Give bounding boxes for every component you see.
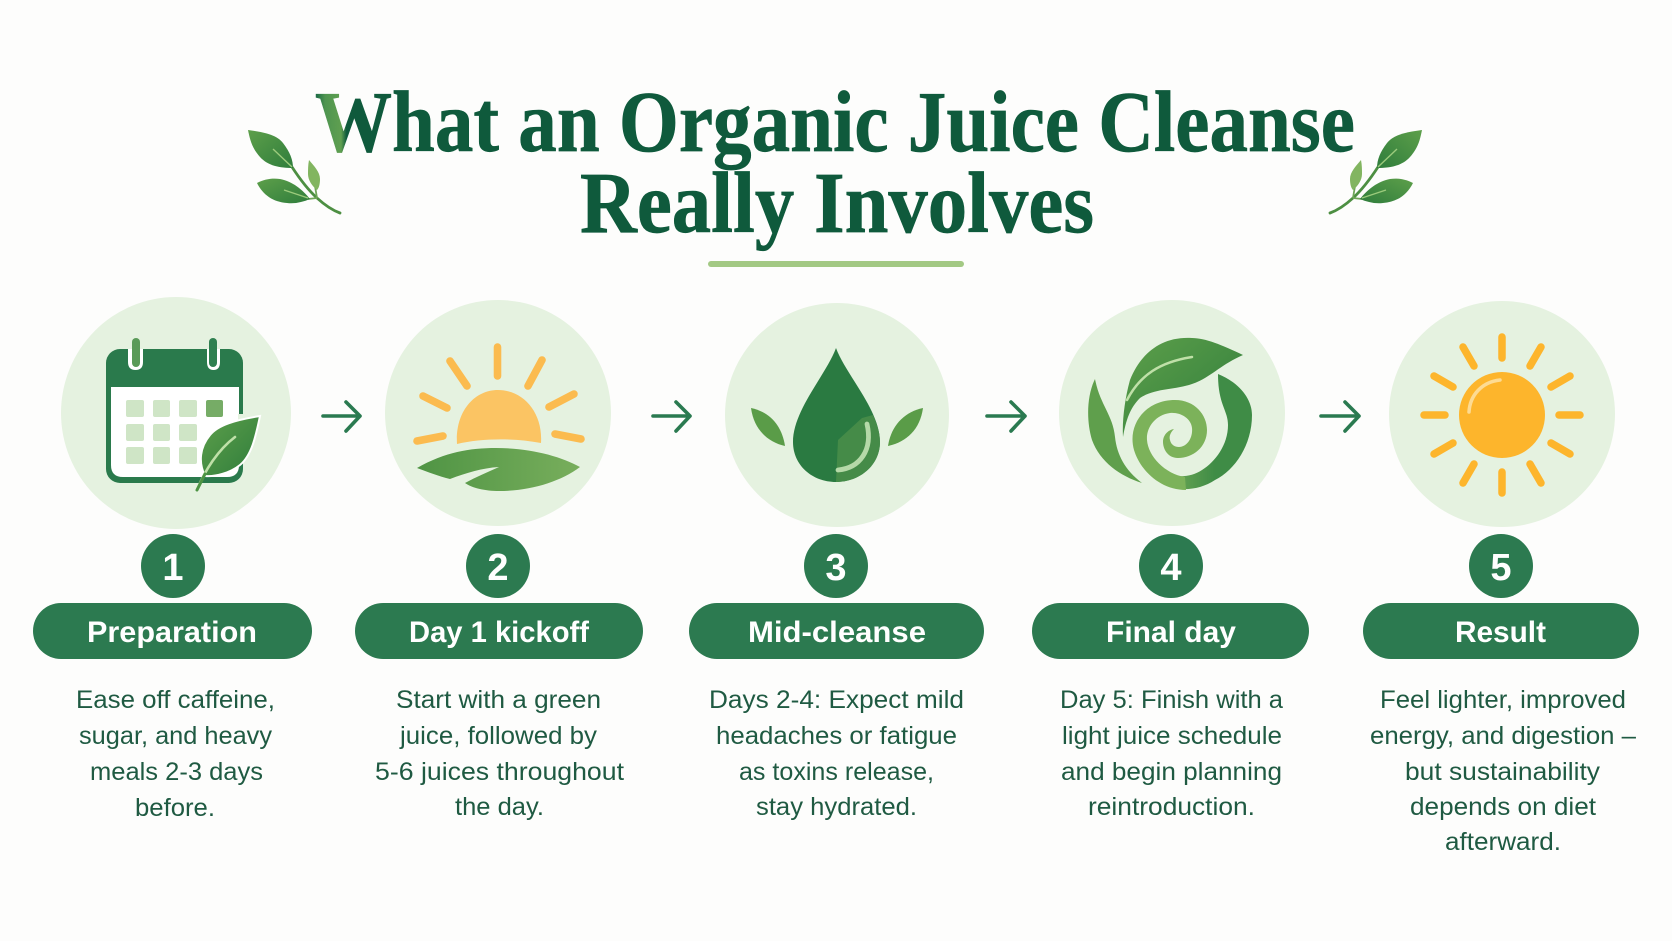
step description 2: juice, followed by (399, 722, 598, 750)
step description 5: afterward. (1445, 828, 1561, 856)
step number 3: 3 (825, 547, 847, 589)
step description 4: Day 5: Finish with a (1060, 686, 1283, 714)
icon: water drop with leaves (751, 348, 923, 482)
step description 1: before. (135, 794, 215, 822)
step label: Final day (1032, 603, 1309, 659)
step label: Preparation (33, 603, 312, 659)
step description 5: depends on diet (1410, 793, 1596, 821)
panel: step 4 final day (1032, 300, 1309, 821)
step description 3: Days 2-4: Expect mild (709, 686, 964, 714)
step number 4 (1139, 534, 1203, 598)
icon background circle (61, 297, 291, 529)
step description 5: but sustainability (1405, 758, 1601, 786)
step label: Day 1 kickoff: Day 1 kickoff (409, 616, 590, 649)
panel: step 5 result (1363, 301, 1639, 856)
step label: Mid-cleanse (689, 603, 984, 659)
step label: Result (1363, 603, 1639, 659)
step number 1 (141, 534, 205, 598)
title: What an Organic Juice Cleanse (315, 73, 1355, 170)
icon: sunrise over leaf (417, 347, 581, 491)
step description 5: energy, and digestion – (1370, 722, 1636, 750)
arrow 2 (653, 402, 690, 431)
icon: left leaf sprig (248, 130, 340, 213)
step description 4: light juice schedule (1062, 722, 1282, 750)
step number 4: 4 (1160, 547, 1182, 589)
step description 2: the day. (455, 793, 544, 821)
step description 2 (375, 686, 624, 821)
title: Really Involves (580, 154, 1094, 251)
step description 4 (1060, 686, 1283, 821)
step description 2: 5-6 juices throughout (375, 758, 624, 786)
step label: Mid-cleanse: Mid-cleanse (748, 616, 926, 649)
panel: step 1 preparation (33, 297, 312, 822)
step description 3: stay hydrated. (756, 793, 917, 821)
title underline (708, 261, 964, 267)
title (315, 73, 1355, 251)
step number 2 (466, 534, 530, 598)
arrow 4 (1321, 402, 1359, 431)
step description 5 (1370, 686, 1636, 856)
step label: Final day: Final day (1106, 616, 1236, 649)
step number 3 (804, 534, 868, 598)
step description 1: Ease off caffeine, (76, 686, 275, 714)
step number 1: 1 (162, 547, 184, 589)
step number 2: 2 (487, 547, 509, 589)
arrow 1 (323, 402, 360, 431)
step description 1 (76, 686, 275, 822)
step description 2: Start with a green (396, 686, 601, 714)
icon background circle (385, 300, 611, 526)
step label: Day 1 kickoff (355, 603, 643, 659)
panel: step 3 mid-cleanse (689, 303, 984, 821)
step description 4: reintroduction. (1088, 793, 1255, 821)
step description 3 (709, 686, 964, 821)
step description 1: meals 2-3 days (90, 758, 263, 786)
step description 5: Feel lighter, improved (1380, 686, 1626, 714)
icon background circle (1059, 300, 1285, 526)
step number 5: 5 (1490, 547, 1512, 589)
icon: right leaf sprig (1330, 130, 1422, 213)
step description 3: headaches or fatigue (716, 722, 957, 750)
arrow 3 (987, 402, 1025, 431)
step label: Preparation: Preparation (87, 616, 257, 649)
step description 3: as toxins release, (739, 758, 934, 786)
step description 4: and begin planning (1061, 758, 1282, 786)
icon background circle (725, 303, 949, 527)
panel: step 2 day 1 kickoff (355, 300, 643, 821)
icon background circle (1389, 301, 1615, 527)
icon: calendar with leaf (106, 338, 260, 490)
step description 1: sugar, and heavy (79, 722, 273, 750)
step number 5 (1469, 534, 1533, 598)
icon: leaf and spiral (1088, 338, 1252, 490)
step label: Result: Result (1455, 616, 1546, 649)
icon: full sun (1424, 337, 1580, 493)
